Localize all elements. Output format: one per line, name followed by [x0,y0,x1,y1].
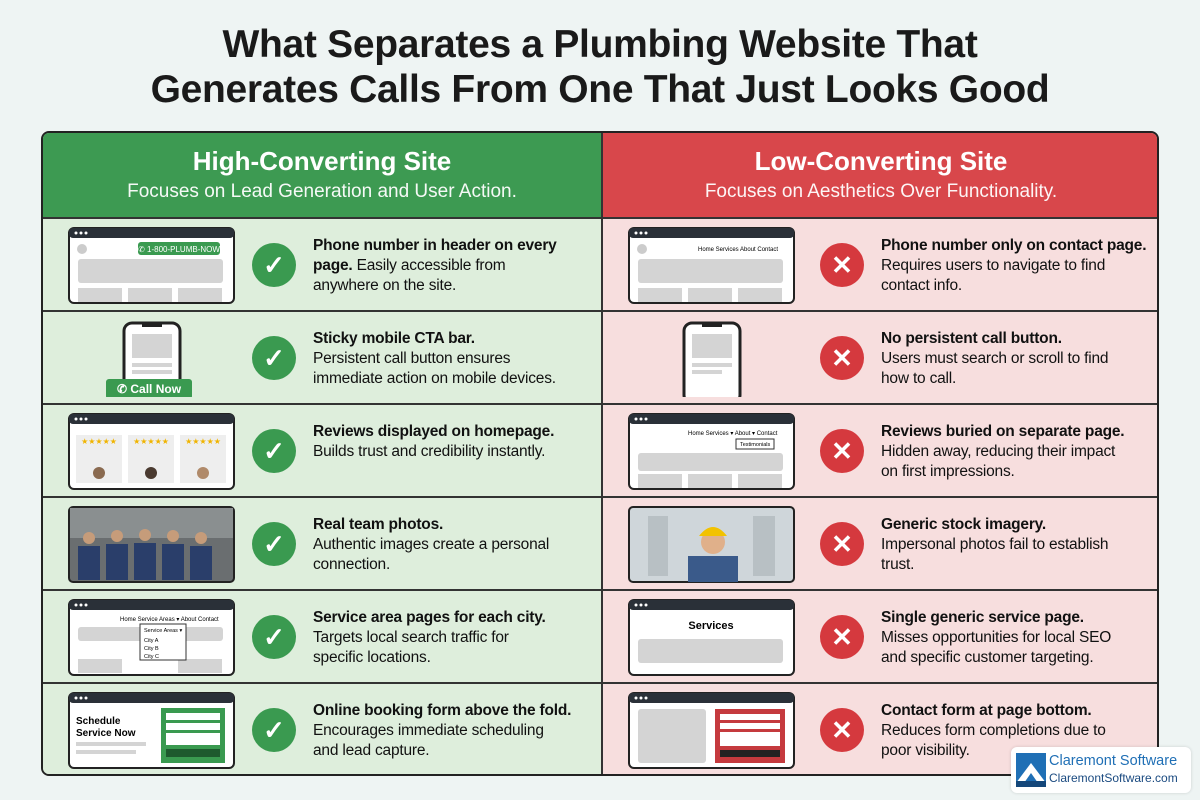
text: page. Easily accessible from [313,257,506,274]
title: Generates Calls From One That Just Looks Good [151,68,1049,111]
icon: x: ✕ [831,715,853,745]
icon: check [252,522,296,566]
icon: browser nav: Home Services About Contact [698,247,778,253]
icon: check [252,429,296,473]
icon: check: ✓ [263,250,285,280]
title [151,23,1049,111]
header: high-converting: Focuses on Lead Generation and User Action. [127,181,517,202]
text: Requires users to navigate to find [881,257,1105,274]
icon: browser with phone [68,227,235,304]
icon: x [820,708,864,752]
text [313,330,556,387]
text [881,237,1146,294]
icon: service areas browser: City A [144,638,159,644]
row 4 low [601,496,1159,589]
icon: x [820,243,864,287]
text: Reduces form completions due to [881,722,1106,739]
icon: service areas browser: City C [144,654,159,660]
text: Generic stock imagery. [881,516,1046,533]
text: trust. [881,556,914,573]
text: Hidden away, reducing their impact [881,443,1115,460]
icon: form at bottom browser [628,692,795,769]
icon: phone [682,322,742,397]
text: Phone number in header on every [313,237,557,254]
text [313,237,557,294]
text: Builds trust and credibility instantly. [313,443,545,460]
text: Impersonal photos fail to establish [881,536,1108,553]
row 3 low [601,403,1159,496]
icon: check: ✓ [263,343,285,373]
header: low-converting: Focuses on Aesthetics Over Functionality. [705,181,1057,202]
row 4 high [43,496,601,589]
header: low-converting [601,133,1159,217]
icon: reviews browser: ★★★★★ [81,437,117,446]
icon: services browser [628,599,795,676]
row 1 low [601,217,1159,310]
text: anywhere on the site. [313,277,456,294]
icon: service areas browser: Home Service Areas ▾ About Contact [120,617,219,623]
icon: logo mark [1016,753,1046,787]
icon: x [820,522,864,566]
row 2 high [43,310,601,403]
row 5 low [601,589,1159,682]
text: poor visibility. [881,742,970,759]
row 5 high [43,589,601,682]
icon: x [820,336,864,380]
text: Real team photos. [313,516,443,533]
text [881,423,1124,480]
text: and specific customer targeting. [881,649,1093,666]
logo text: ClaremontSoftware.com [1049,771,1178,785]
text: on first impressions. [881,463,1015,480]
text [881,609,1111,666]
text: Service area pages for each city. [313,609,546,626]
icon: phone with call now: ✆ Call Now [117,382,182,396]
text: Phone number only on contact page. [881,237,1146,254]
text [881,516,1108,573]
icon: reviews browser: ★★★★★ [133,437,169,446]
text: and lead capture. [313,742,429,759]
icon: browser testimonials menu [628,413,795,490]
row 6 high [43,682,601,778]
icon: service areas browser: City B [144,646,159,652]
icon: browser nav [628,227,795,304]
icon: service areas browser [68,599,235,676]
icon: x: ✕ [831,343,853,373]
text [313,516,549,573]
header: low-converting: Low-Converting Site [755,146,1007,176]
text: Sticky mobile CTA bar. [313,330,475,347]
header: high-converting [43,133,601,217]
row 2 low [601,310,1159,403]
text [313,702,571,759]
icon: check: ✓ [263,622,285,652]
text: Single generic service page. [881,609,1084,626]
text: Targets local search traffic for [313,629,509,646]
text: connection. [313,556,390,573]
text: Reviews displayed on homepage. [313,423,554,440]
icon: phone with call now [106,322,192,397]
icon: reviews browser [68,413,235,490]
text [313,609,546,666]
logo: Claremont Software [1011,747,1191,793]
text: how to call. [881,370,956,387]
text: Misses opportunities for local SEO [881,629,1111,646]
comparison table [41,131,1159,776]
row 3 high [43,403,601,496]
text: Contact form at page bottom. [881,702,1092,719]
text: immediate action on mobile devices. [313,370,556,387]
text: Encourages immediate scheduling [313,722,544,739]
icon: check [252,708,296,752]
text [881,330,1108,387]
icon: x: ✕ [831,529,853,559]
row 6 low [601,682,1159,778]
header: high-converting: High-Converting Site [193,146,451,176]
icon: services browser: Services [688,620,734,632]
text: Persistent call button ensures [313,350,510,367]
icon: check: ✓ [263,529,285,559]
icon: booking form browser: Service Now [76,728,136,739]
text: Users must search or scroll to find [881,350,1108,367]
logo text: Claremont Software [1049,753,1177,769]
text [881,702,1106,759]
icon: browser testimonials menu: Testimonials [740,442,771,448]
icon: booking form browser [68,692,235,769]
icon: check [252,243,296,287]
icon: x [820,429,864,473]
icon: service areas browser: Service Areas ▾ [144,628,182,634]
icon: x [820,615,864,659]
text: Authentic images create a personal [313,536,549,553]
icon: check: ✓ [263,715,285,745]
text [313,423,554,460]
text: No persistent call button. [881,330,1062,347]
icon: check [252,336,296,380]
icon: check: ✓ [263,436,285,466]
text: contact info. [881,277,962,294]
icon: stock photo [628,506,795,583]
icon: x: ✕ [831,436,853,466]
text: Online booking form above the fold. [313,702,571,719]
row 1 high [43,217,601,310]
icon: x: ✕ [831,622,853,652]
logo text [1049,753,1178,785]
icon: team photo [68,506,235,583]
text: specific locations. [313,649,431,666]
text: Reviews buried on separate page. [881,423,1124,440]
icon: booking form browser: Schedule [76,716,121,727]
icon: browser testimonials menu: Home Services ▾ About ▾ Contact [688,431,778,437]
icon: check [252,615,296,659]
icon: browser with phone: ✆ 1-800-PLUMB-NOW [138,245,220,254]
icon: reviews browser: ★★★★★ [185,437,221,446]
title: What Separates a Plumbing Website That [222,23,978,66]
icon: x: ✕ [831,250,853,280]
